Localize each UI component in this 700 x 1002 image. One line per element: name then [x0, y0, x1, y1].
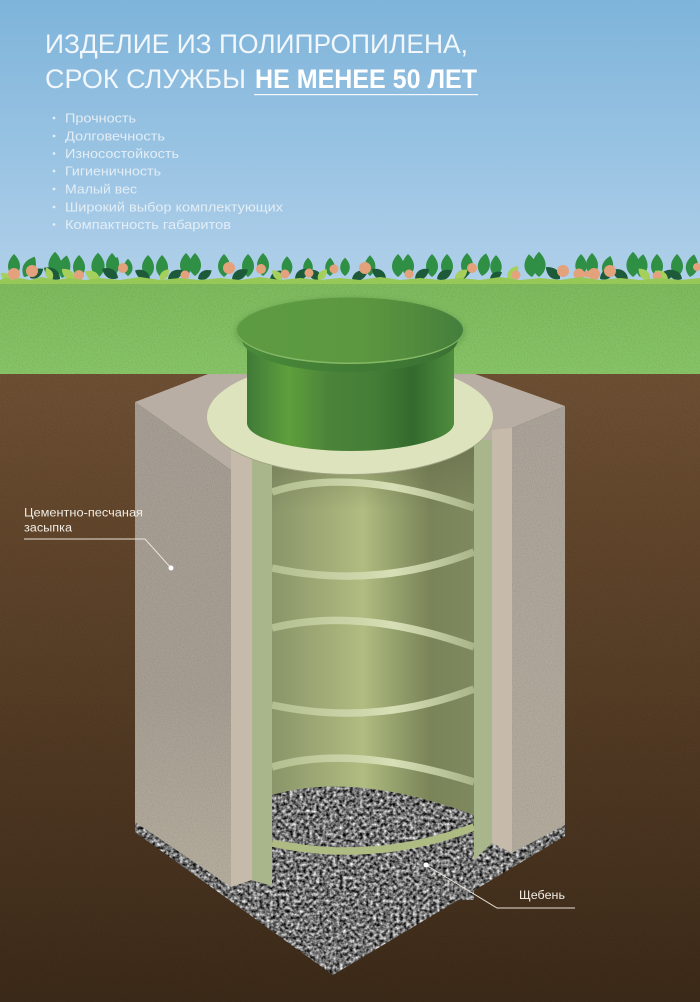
right cut face — [492, 428, 512, 853]
texture overlay on lawn and soil — [0, 284, 700, 1002]
list of benefits: Прочность — [65, 112, 136, 126]
gravel bed — [135, 822, 565, 975]
leader line — [426, 865, 575, 908]
texture overlay on backfill — [135, 402, 565, 892]
lawn — [0, 283, 700, 375]
left cut face — [231, 450, 252, 887]
neck body — [247, 345, 454, 451]
gravel inside tank — [272, 786, 474, 900]
title underline — [254, 94, 478, 95]
title emphasis: НЕ МЕНЕЕ 50 ЛЕТ — [255, 64, 477, 94]
list of benefits — [53, 112, 284, 232]
leader line — [24, 539, 171, 568]
rib 1 — [272, 482, 474, 508]
callout: backfill — [24, 508, 174, 570]
backfill block — [135, 374, 565, 887]
title line 1: ИЗДЕЛИЕ ИЗ ПОЛИПРОПИЛЕНА, — [45, 29, 468, 59]
rib 4 — [272, 689, 474, 713]
grass fringe — [0, 277, 700, 284]
sky background — [0, 0, 700, 284]
title line 2: СРОК СЛУЖБЫ — [45, 64, 246, 94]
list of benefits: Гигиеничность — [65, 164, 161, 178]
lid edge highlight — [237, 298, 463, 364]
title — [45, 29, 478, 95]
left tank wall — [252, 440, 272, 886]
tank interior — [272, 440, 474, 835]
collar shadow — [207, 361, 493, 475]
left outer face — [135, 402, 231, 887]
lid rim — [242, 306, 458, 372]
block top surface — [135, 374, 565, 470]
rib 2 — [272, 552, 474, 576]
rib 3 — [272, 620, 474, 647]
callout: backfill: засыпка — [24, 522, 73, 534]
right tank wall — [474, 440, 492, 860]
interior top shading — [272, 440, 474, 510]
list of benefits: Компактность габаритов — [65, 218, 231, 232]
soil cross-section — [0, 374, 700, 1002]
green tank neck — [235, 298, 465, 451]
tank ribs — [272, 482, 474, 851]
list of benefits: Долговечность — [65, 130, 165, 144]
rib 5 — [272, 758, 474, 782]
row of plants and flowers — [0, 252, 700, 284]
leader dot — [168, 566, 174, 570]
callout: gravel — [424, 862, 575, 908]
leader dot — [424, 862, 428, 868]
list of benefits: Малый вес — [65, 182, 137, 196]
lid shadow — [235, 298, 465, 366]
callout text: Щебень — [519, 890, 565, 902]
list of benefits: Широкий выбор комплектующих — [65, 200, 284, 214]
right outer face — [512, 406, 565, 853]
collar flange — [207, 360, 493, 474]
lid top — [237, 298, 463, 362]
callout text: Цементно-песчаная — [24, 508, 143, 520]
list of benefits: Износостойкость — [65, 147, 179, 161]
rib 6 — [272, 827, 474, 851]
